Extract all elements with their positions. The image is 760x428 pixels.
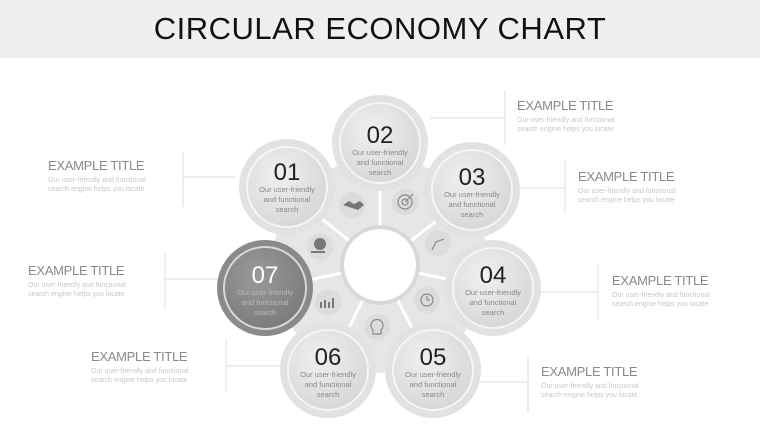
circle 01 bbox=[239, 139, 335, 235]
text block right 3: search engine helps you locate bbox=[612, 301, 709, 308]
circle 06: and functional bbox=[305, 380, 352, 389]
circle 06: 06 bbox=[315, 344, 341, 371]
text block right 3 bbox=[612, 273, 710, 308]
circle 01: and functional bbox=[264, 195, 311, 204]
circle 05: Our user-friendly bbox=[405, 370, 461, 379]
text block left 1: search engine helps you locate bbox=[48, 186, 145, 193]
circle 04: and functional bbox=[470, 298, 517, 307]
text block left 1: EXAMPLE TITLE bbox=[48, 158, 144, 173]
circle 03: search bbox=[461, 210, 483, 219]
circle 07 highlighted: search bbox=[254, 308, 276, 317]
circle 06: search bbox=[317, 390, 339, 399]
circle 07 highlighted bbox=[217, 240, 313, 336]
circle 04 bbox=[445, 240, 541, 336]
text block right 1: search engine helps you locate bbox=[517, 126, 614, 133]
text block right 3: EXAMPLE TITLE bbox=[612, 273, 708, 288]
header: CIRCULAR ECONOMY CHART bbox=[154, 11, 606, 46]
text block left 2: search engine helps you locate bbox=[28, 291, 125, 298]
circle 05 bbox=[385, 322, 481, 418]
circle 04: search bbox=[482, 308, 504, 317]
circle 03: 03 bbox=[459, 164, 485, 191]
text block left 3: search engine helps you locate bbox=[91, 377, 188, 384]
icons bbox=[307, 189, 451, 340]
circle 02: 02 bbox=[367, 122, 393, 149]
circle 05: and functional bbox=[410, 380, 457, 389]
circle 01: search bbox=[276, 205, 298, 214]
petal ring bbox=[272, 157, 488, 373]
text block left 2 bbox=[28, 263, 126, 298]
circle 05: search bbox=[422, 390, 444, 399]
text block right 2: EXAMPLE TITLE bbox=[578, 169, 674, 184]
text block left 1: Our user-friendly and functional bbox=[48, 177, 146, 184]
header bbox=[0, 0, 760, 58]
circle 07 highlighted: 07 bbox=[252, 262, 278, 289]
text block right 2: Our user-friendly and functional bbox=[578, 188, 676, 195]
text block right 4: EXAMPLE TITLE bbox=[541, 364, 637, 379]
text block left 2: EXAMPLE TITLE bbox=[28, 263, 124, 278]
text block left 2: Our user-friendly and functional bbox=[28, 282, 126, 289]
circle 01: 01 bbox=[274, 159, 300, 186]
circle 06: Our user-friendly bbox=[300, 370, 356, 379]
circle 04: Our user-friendly bbox=[465, 288, 521, 297]
text block right 1: EXAMPLE TITLE bbox=[517, 98, 613, 113]
circle 07 highlighted: Our user-friendly bbox=[237, 288, 293, 297]
text block left 3: Our user-friendly and functional bbox=[91, 368, 189, 375]
circle 02: and functional bbox=[357, 158, 404, 167]
circle 04: 04 bbox=[480, 262, 506, 289]
circle 02: search bbox=[369, 168, 391, 177]
circle 03: Our user-friendly bbox=[444, 190, 500, 199]
text block right 4: Our user-friendly and functional bbox=[541, 383, 639, 390]
circle 03 bbox=[424, 142, 520, 238]
circle 01: Our user-friendly bbox=[259, 185, 315, 194]
circle 07 highlighted: and functional bbox=[242, 298, 289, 307]
circle 05: 05 bbox=[420, 344, 446, 371]
text block left 1 bbox=[48, 158, 146, 193]
circle 03: and functional bbox=[449, 200, 496, 209]
text block right 1 bbox=[517, 98, 615, 133]
text block left 3 bbox=[91, 349, 189, 384]
text block right 4 bbox=[541, 364, 639, 399]
text block right 3: Our user-friendly and functional bbox=[612, 292, 710, 299]
circle 06 bbox=[280, 322, 376, 418]
circle 02: Our user-friendly bbox=[352, 148, 408, 157]
text block right 2: search engine helps you locate bbox=[578, 197, 675, 204]
text block right 4: search engine helps you locate bbox=[541, 392, 638, 399]
text block right 1: Our user-friendly and functional bbox=[517, 117, 615, 124]
circle 02 bbox=[332, 95, 428, 191]
text block left 3: EXAMPLE TITLE bbox=[91, 349, 187, 364]
text block right 2 bbox=[578, 169, 676, 204]
